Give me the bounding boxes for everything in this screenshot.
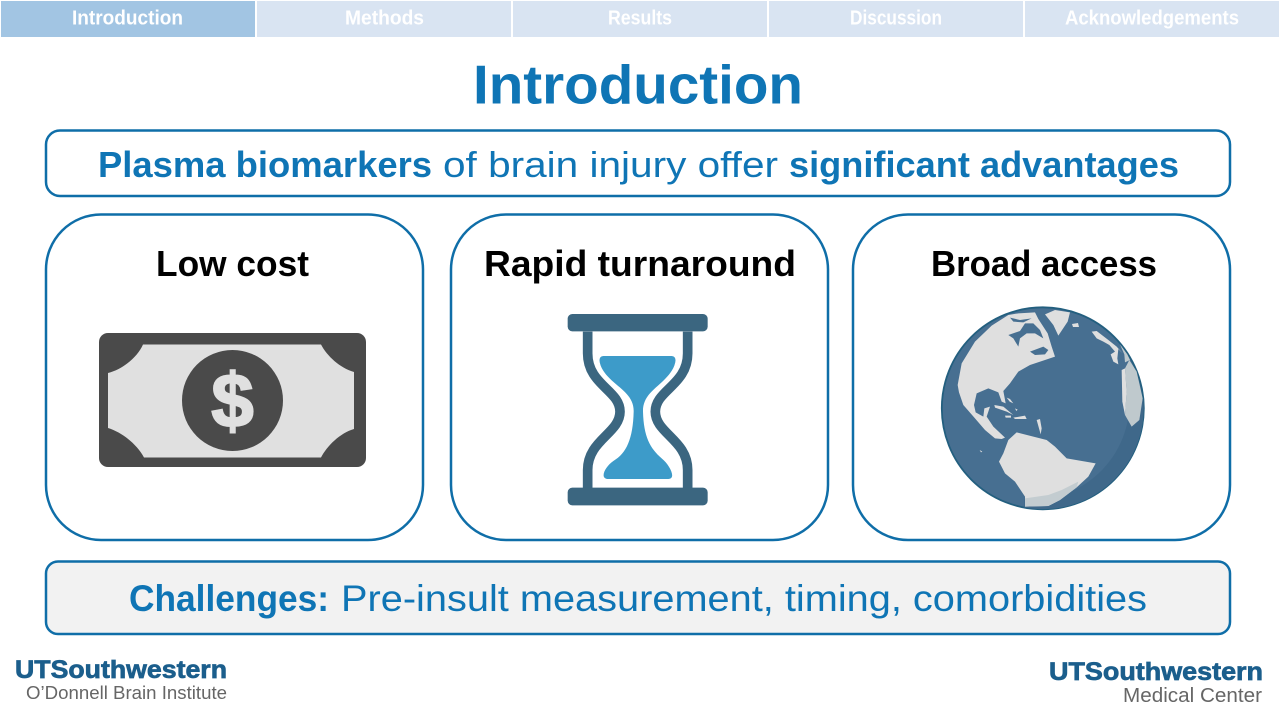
panel: challenges: Challenges: <box>129 578 329 619</box>
nav tab: Results: Results <box>608 8 672 30</box>
nav tab: Introduction (active) <box>1 1 255 37</box>
nav tab: Introduction (active): Introduction <box>72 8 183 30</box>
panel: low cost <box>46 214 423 540</box>
logo: UT Southwestern Medical Center: Medical Center <box>1123 685 1262 707</box>
panel: plasma biomarkers statement <box>46 130 1230 196</box>
icon: hourglass <box>568 314 708 505</box>
nav tab: Discussion: Discussion <box>850 8 942 30</box>
island: Iceland <box>1072 323 1079 327</box>
panel: plasma biomarkers statement: of brain injury offer <box>443 144 778 185</box>
icon: dollar bill <box>99 333 366 467</box>
nav tab: Methods <box>257 1 511 37</box>
nav tab: Results <box>513 1 767 37</box>
navigation bar <box>1 1 1279 37</box>
heading: low cost: Low cost <box>156 243 309 284</box>
heading: broad access: Broad access <box>931 243 1157 284</box>
icon: dollar bill: $ <box>211 359 254 444</box>
panel: challenges <box>46 562 1230 634</box>
logo: UT Southwestern Medical Center: UTSouthwestern <box>1049 658 1263 686</box>
logo: UT Southwestern O'Donnell Brain Institute: O’Donnell Brain Institute <box>26 682 227 703</box>
nav tab: Discussion <box>769 1 1023 37</box>
logo: UT Southwestern O'Donnell Brain Institute <box>15 656 227 703</box>
panel: plasma biomarkers statement: Plasma biomarkers <box>98 144 432 185</box>
nav tab: Methods: Methods <box>345 8 424 30</box>
panel: rapid turnaround <box>451 214 828 540</box>
heading: rapid turnaround: Rapid turnaround <box>484 243 796 284</box>
nav tab: Acknowledgements: Acknowledgements <box>1065 8 1239 30</box>
panel: plasma biomarkers statement: significant advantages <box>789 144 1179 185</box>
panel: broad access <box>853 214 1230 540</box>
title: Introduction <box>473 54 803 116</box>
panel: challenges: Pre-insult measurement, timing, comorbidities <box>341 578 1147 619</box>
nav tab: Acknowledgements <box>1025 1 1279 37</box>
icon: globe <box>942 307 1144 509</box>
logo: UT Southwestern O'Donnell Brain Institute: UTSouthwestern <box>15 656 227 684</box>
logo: UT Southwestern Medical Center <box>1049 658 1263 707</box>
